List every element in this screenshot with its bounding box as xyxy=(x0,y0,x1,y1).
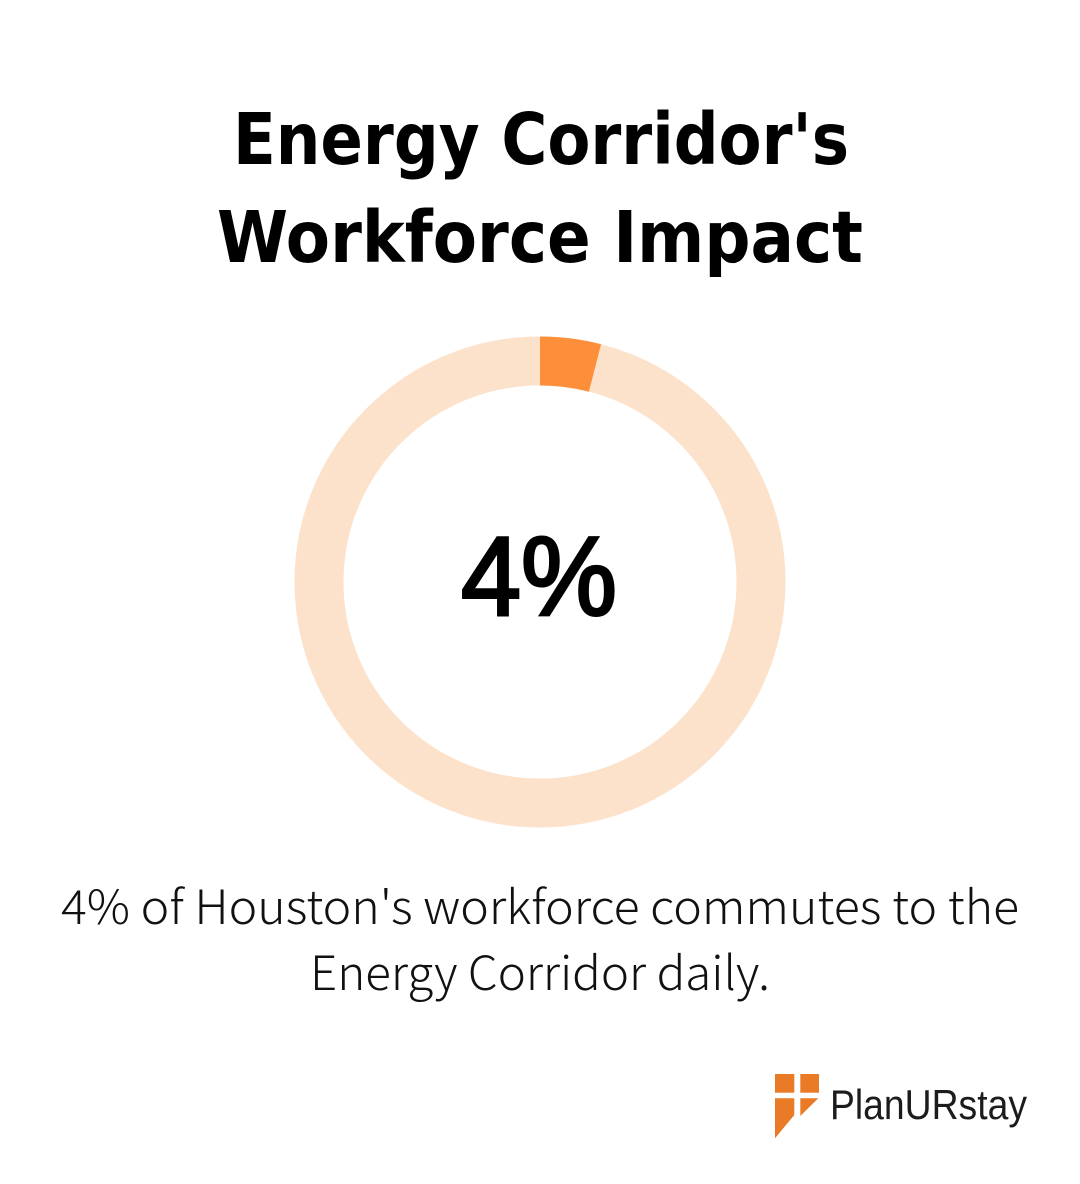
donut chart: 4 percent xyxy=(319,336,761,803)
description text: 4% of Houston's workforce commutes to the xyxy=(61,869,1019,938)
logo mark xyxy=(775,1074,819,1138)
description text xyxy=(61,869,1019,1004)
title: Energy Corridor's xyxy=(233,98,849,181)
logo: PlanURstay xyxy=(775,1074,1027,1138)
description text: Energy Corridor daily. xyxy=(310,935,770,1004)
logo wordmark: PlanURstay xyxy=(830,1081,1027,1128)
title: Workforce Impact xyxy=(217,196,863,279)
center value: 4% xyxy=(461,514,617,639)
donut highlighted segment xyxy=(540,336,601,392)
title xyxy=(217,98,863,279)
donut track xyxy=(319,361,761,803)
